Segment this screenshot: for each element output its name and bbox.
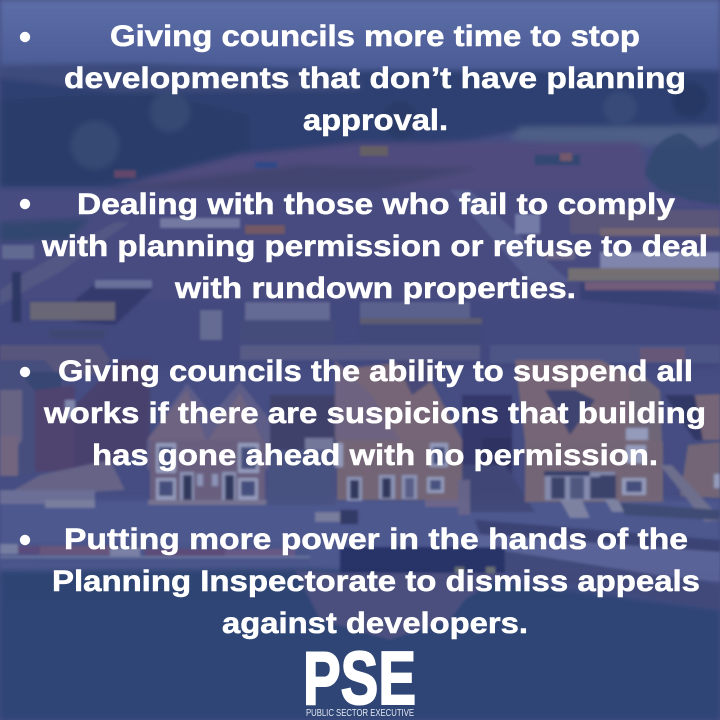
diagonal road [450, 190, 570, 282]
bullet 1: more time to stop developments: approval. [303, 104, 448, 137]
building frames [75, 280, 152, 325]
bullet 3: suspend works: works if there are suspicions that building [43, 397, 706, 430]
distant hills and trees [0, 64, 720, 188]
bullet 3: suspend works: has gone ahead with no permission. [92, 439, 658, 472]
road and fence [475, 520, 720, 552]
left large roofs [0, 345, 110, 375]
left houses [0, 360, 75, 476]
bullet 2: failure to comply [20, 188, 708, 305]
bullet 4: Planning Inspectorate powers: Planning Inspectorate to dismiss appeals [52, 565, 700, 598]
road [0, 500, 720, 570]
right edge house C [665, 395, 720, 440]
bullet 2: failure to comply: Dealing with those who fail to comply [77, 188, 675, 221]
gap with dark drive [462, 395, 512, 475]
right detached house A [335, 360, 462, 440]
right detached house B [515, 360, 662, 442]
gap with garage [270, 395, 335, 495]
bullet 4: Planning Inspectorate powers: Putting more power in the hands of the [64, 523, 688, 556]
bullet 3: suspend works [20, 355, 706, 472]
middle semi-detached house [147, 382, 270, 470]
materials and site stores [160, 218, 240, 228]
logo: PSE Public Sector Executive: PUBLIC SECTOR EXECUTIVE [306, 708, 414, 719]
bullet 4: Planning Inspectorate powers: against developers. [222, 607, 528, 640]
sky [0, 0, 720, 74]
bullet 1: more time to stop developments [20, 20, 686, 137]
right tree [645, 133, 720, 205]
bullet 2: failure to comply: with planning permission or refuse to deal [41, 230, 708, 263]
sandy mound [295, 570, 505, 640]
mid left ground [0, 190, 720, 300]
bullet 2: failure to comply: with rundown properties. [174, 272, 576, 305]
terraces and steps [75, 360, 150, 475]
bullet 1: more time to stop developments: Giving councils more time to stop [110, 20, 640, 53]
bullet 4: Planning Inspectorate powers [20, 523, 700, 640]
bullet 1: more time to stop developments: developments that don’t have planning [64, 62, 686, 95]
bullet 3: suspend works: Giving councils the ability to suspend all [58, 355, 693, 388]
logo: PSE Public Sector Executive: PSE [303, 636, 416, 720]
lower construction zone [0, 300, 720, 370]
grass [0, 568, 720, 720]
construction machinery [114, 170, 136, 178]
right fields [510, 126, 720, 146]
